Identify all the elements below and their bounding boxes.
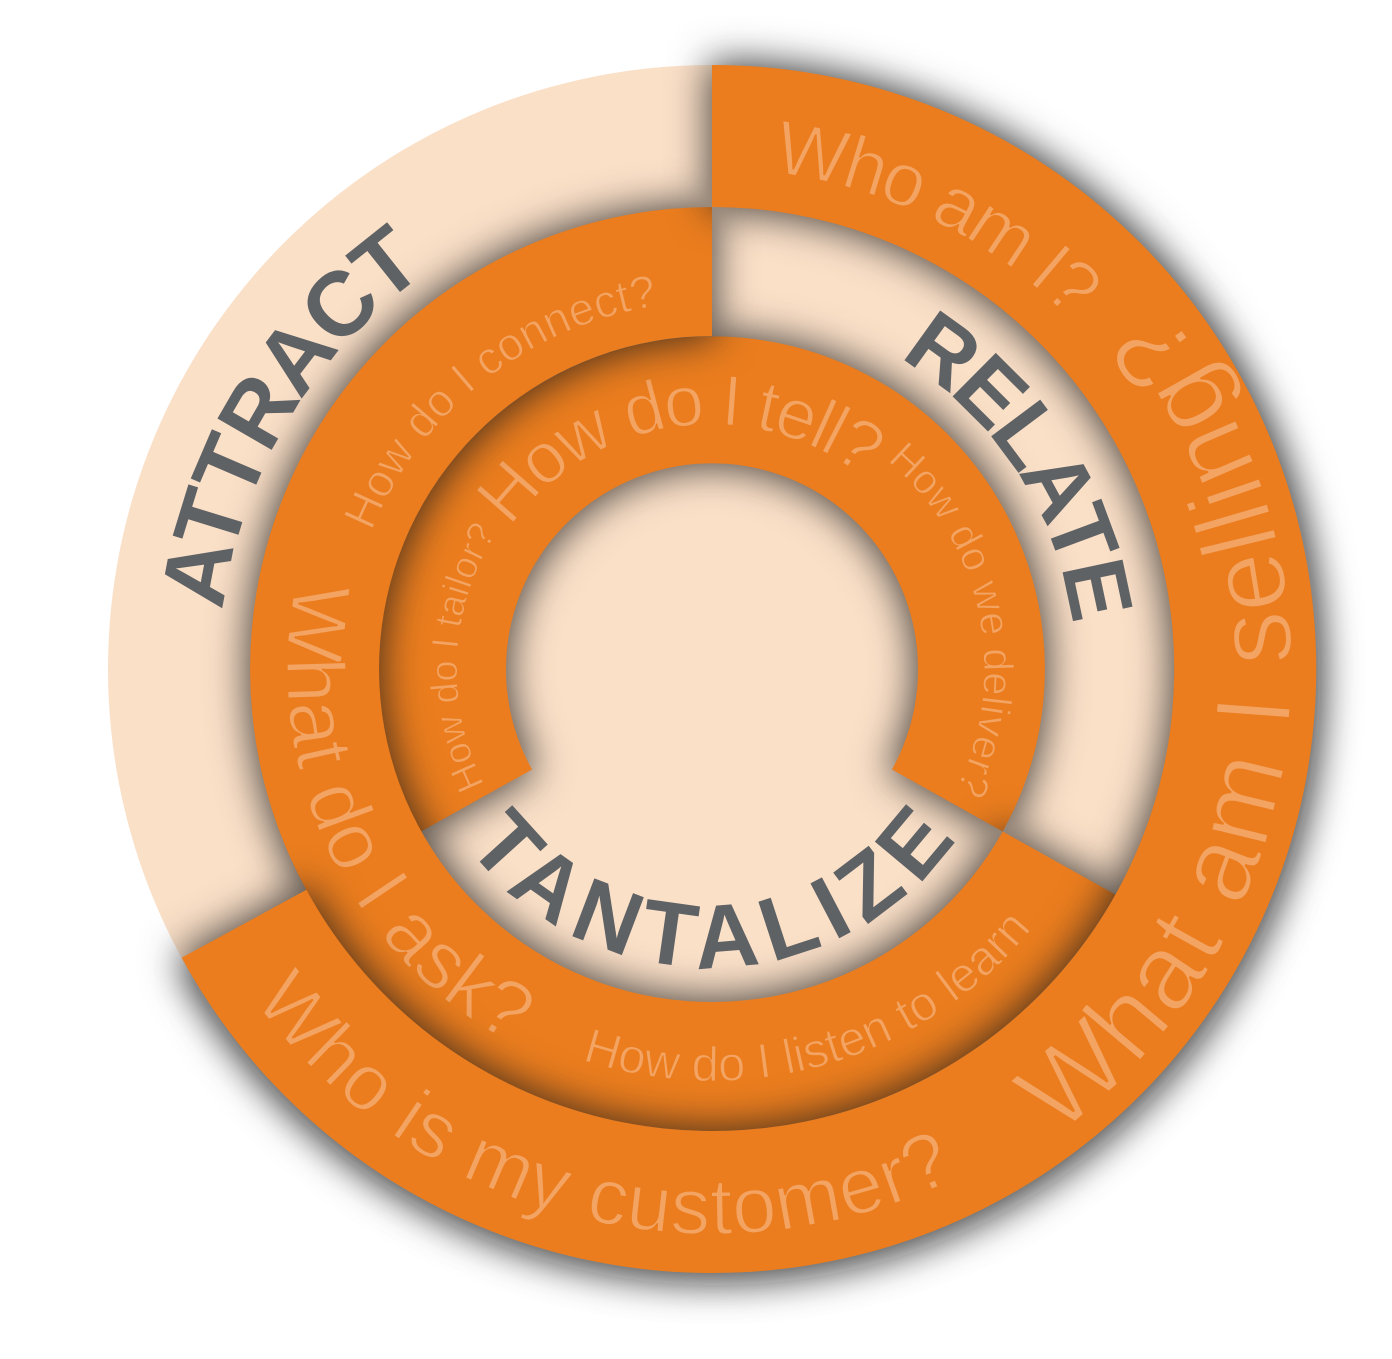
panel: inner orange ring [379,336,1045,832]
text: How do I tell?: How do I tell? [477,376,882,522]
heading: TANTALIZE: TANTALIZE [451,781,979,989]
outer drop shadow [186,77,1320,1285]
text: What do I ask?: What do I ask? [288,589,532,1032]
heading: ATTRACT: ATTRACT [164,222,410,608]
text: What am I selling?: What am I selling? [1012,331,1291,1121]
peach base disc [108,65,1316,1273]
text: Who is my customer?: Who is my customer? [264,967,938,1234]
heading: RELATE: RELATE [888,291,1152,625]
text: Who am I?: Who am I? [783,121,1098,306]
text: How do I tailor?: How do I tailor? [430,524,492,792]
text: How do we deliver?: How do we deliver? [890,442,1014,798]
panel: middle orange ring [250,207,1115,1131]
text: How do I connect?: How do I connect? [344,276,652,528]
text: How do I listen to learn: How do I listen to learn [586,917,1030,1081]
panel: outer orange ring [182,65,1316,1273]
